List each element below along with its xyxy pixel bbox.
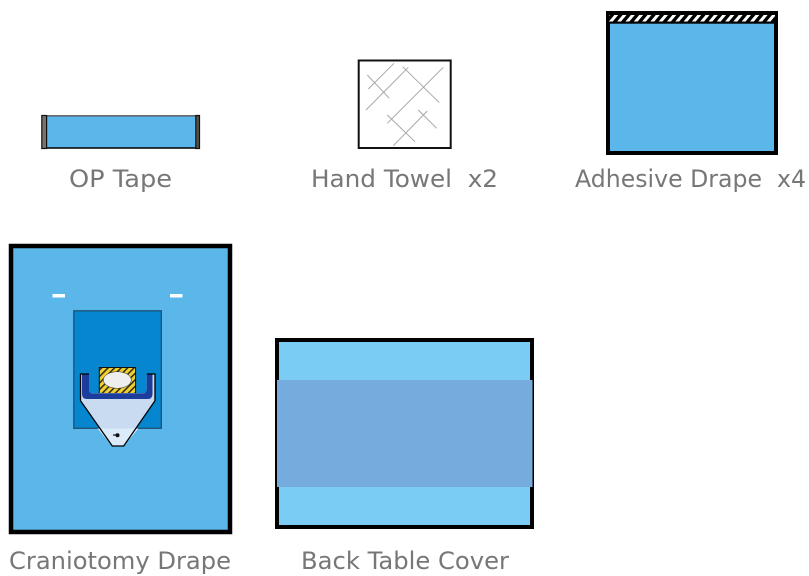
label: Craniotomy Drape: Craniotomy Drape: [9, 547, 231, 575]
white tabs: [52, 294, 182, 298]
label: OP Tape: OP Tape: [69, 165, 172, 193]
label: Back Table Cover: Back Table Cover: [301, 547, 509, 575]
icon: adhesive drape with hatched strip: [608, 13, 776, 153]
inner fenestration panel: [74, 311, 161, 428]
tube port: [116, 433, 120, 437]
item: OP Tape: [42, 116, 199, 193]
icon: hand towel square with crease lines: [359, 60, 451, 148]
item: Back Table Cover: [277, 340, 532, 575]
item: Adhesive Drape: [575, 13, 806, 193]
icon: OP tape strip: [42, 116, 199, 148]
label: Adhesive Drape x4: Adhesive Drape x4: [575, 165, 806, 193]
label: Hand Towel x2: Hand Towel x2: [311, 165, 498, 193]
drape body: [11, 246, 230, 532]
icon: back table cover: [277, 340, 532, 527]
icon: craniotomy drape: [11, 246, 230, 532]
pouch: [80, 374, 155, 446]
center band: [277, 380, 532, 487]
item: Craniotomy Drape: [9, 246, 231, 575]
item: Hand Towel: [311, 60, 498, 193]
blue collar: [82, 374, 152, 399]
yellow hatched window: [99, 368, 136, 394]
